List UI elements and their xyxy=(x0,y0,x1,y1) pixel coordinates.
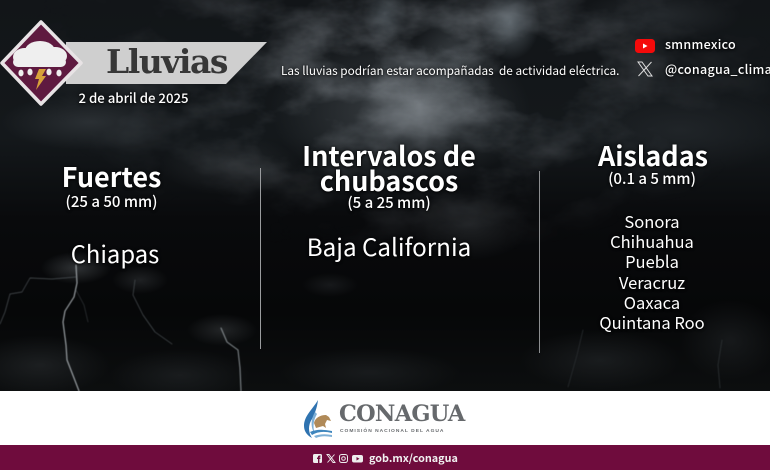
heading: Fuertes: Fuertes xyxy=(62,156,161,195)
state: Baja California xyxy=(307,228,471,263)
text: Comisión Nacional del Agua: COMISIÓN NACIONAL DEL AGUA xyxy=(340,429,444,434)
social icons xyxy=(313,454,363,463)
range: (0.1 a 5 mm) xyxy=(608,168,696,189)
column: Fuertes xyxy=(62,156,161,270)
text: gob.mx/conagua: gob.mx/conagua xyxy=(369,450,458,466)
social accounts xyxy=(635,34,770,78)
date: 2 de abril de 2025 xyxy=(78,88,188,107)
list of states: Puebla xyxy=(625,249,679,273)
note: electrical activity: Las lluvias podrían estar acompañadas de actividad eléctrica. xyxy=(281,62,619,79)
list of states: Chihuahua xyxy=(610,229,694,253)
footer: white band xyxy=(0,391,770,445)
footer: maroon band xyxy=(0,445,770,470)
list of states: Sonora xyxy=(624,209,680,233)
icon: water and jaguar emblem xyxy=(304,400,332,438)
icon: X xyxy=(637,62,653,76)
list of states xyxy=(599,209,705,334)
state: Chiapas xyxy=(71,235,159,270)
icon: rain cloud with lightning in diamond xyxy=(0,20,83,106)
column: Aisladas xyxy=(598,135,708,334)
divider xyxy=(539,171,540,353)
list of states: Quintana Roo xyxy=(599,310,705,334)
divider xyxy=(260,168,261,349)
icon: YouTube xyxy=(635,39,655,53)
heading: Aisladas: Aisladas xyxy=(598,135,708,174)
ribbon xyxy=(66,42,267,84)
text: smnmexico: smnmexico xyxy=(665,34,736,53)
heading: Lluvias: Lluvias xyxy=(106,42,227,81)
list of states: Oaxaca xyxy=(624,290,680,314)
text: CONAGUA wordmark: CONAGUA xyxy=(339,401,465,427)
logo: CONAGUA xyxy=(304,400,466,438)
range: (5 a 25 mm) xyxy=(347,192,431,213)
header: Lluvias ribbon and icon xyxy=(0,20,267,106)
heading: Intervalos de chubascos: Intervalos de chubascos xyxy=(302,135,476,198)
column: Intervalos de chubascos xyxy=(302,135,476,263)
list of states: Veracruz xyxy=(619,270,685,294)
range: (25 a 50 mm) xyxy=(66,191,157,212)
text: @conagua_clima: @conagua_clima xyxy=(665,59,770,78)
